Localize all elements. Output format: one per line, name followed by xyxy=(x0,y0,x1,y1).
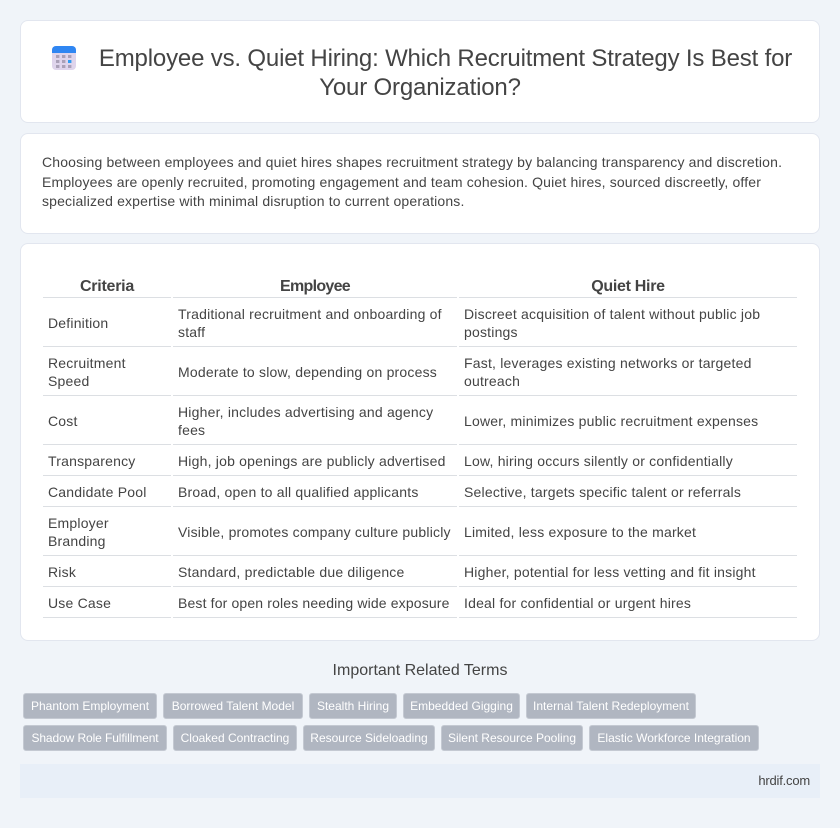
row: Employer Branding: Branding xyxy=(48,533,106,549)
Definition: Quiet Hire: postings xyxy=(464,324,518,340)
Definition: Employee: staff xyxy=(178,324,205,340)
Cost: Employee: fees xyxy=(178,422,205,438)
Cost: Quiet Hire: Lower, minimizes public recruitment expenses xyxy=(464,413,758,429)
text block: introduction: Employees are openly recruited, promoting engagement and team cohesion. Quiet hires, sourced discreetly, offer xyxy=(42,174,761,190)
Cost: Employee: Higher, includes advertising and agency xyxy=(178,404,433,420)
row: Cost: Cost xyxy=(48,413,78,429)
Use Case: Quiet Hire: Ideal for confidential or urgent hires xyxy=(464,595,691,611)
tag: Resource Sideloading xyxy=(303,725,435,751)
tag: Resource Sideloading: Resource Sideloading xyxy=(310,731,428,745)
panel: header xyxy=(20,20,820,123)
tag: Borrowed Talent Model: Borrowed Talent Model xyxy=(172,699,294,713)
icon: calendar xyxy=(52,46,76,70)
tag: Elastic Workforce Integration xyxy=(589,725,759,751)
tag: Shadow Role Fulfillment: Shadow Role Fulfillment xyxy=(31,731,159,745)
table header: Quiet Hire: Quiet Hire xyxy=(591,278,665,295)
tag: Silent Resource Pooling: Silent Resource Pooling xyxy=(448,731,576,745)
tag: Stealth Hiring: Stealth Hiring xyxy=(317,699,389,713)
Candidate Pool: Employee: Broad, open to all qualified applicants xyxy=(178,484,419,500)
row: Transparency: Transparency xyxy=(48,453,135,469)
tag: Internal Talent Redeployment: Internal Talent Redeployment xyxy=(533,699,689,713)
tag: Phantom Employment: Phantom Employment xyxy=(31,699,149,713)
table header: Employee: Employee xyxy=(280,278,350,295)
tag: Silent Resource Pooling xyxy=(441,725,583,751)
row: Definition: Definition xyxy=(48,315,108,331)
Recruitment Speed: Quiet Hire xyxy=(464,355,752,389)
Risk: Quiet Hire: Higher, potential for less vetting and fit insight xyxy=(464,564,756,580)
row: Employer Branding xyxy=(48,515,109,549)
title: Your Organization? xyxy=(319,74,521,101)
row: Risk: Risk xyxy=(48,564,76,580)
Risk: Employee: Standard, predictable due diligence xyxy=(178,564,404,580)
row: Recruitment Speed: Speed xyxy=(48,373,89,389)
tag: Embedded Gigging xyxy=(403,693,520,719)
Recruitment Speed: Quiet Hire: outreach xyxy=(464,373,520,389)
Candidate Pool: Quiet Hire: Selective, targets specific talent or referrals xyxy=(464,484,741,500)
Recruitment Speed: Employee: Moderate to slow, depending on process xyxy=(178,364,437,380)
row: Recruitment Speed xyxy=(48,355,126,389)
Cost: Employee xyxy=(178,404,434,438)
footer bar xyxy=(20,764,820,798)
Transparency: Employee: High, job openings are publicly advertised xyxy=(178,453,446,469)
text block: introduction: Choosing between employees and quiet hires shapes recruitment strategy by balancing transparency and discretion. xyxy=(42,154,782,170)
tag: Phantom Employment xyxy=(23,693,157,719)
Definition: Employee xyxy=(178,306,442,340)
text block: introduction: specialized expertise with minimal disruption to current operations. xyxy=(42,193,465,209)
Definition: Employee: Traditional recruitment and onboarding of xyxy=(178,306,442,322)
tag: Cloaked Contracting: Cloaked Contracting xyxy=(181,731,289,745)
row: Recruitment Speed: Recruitment xyxy=(48,355,126,371)
tag: Borrowed Talent Model xyxy=(163,693,303,719)
tag: Stealth Hiring xyxy=(309,693,397,719)
row: Employer Branding: Employer xyxy=(48,515,109,531)
panel: introduction xyxy=(20,133,820,234)
tag: Elastic Workforce Integration: Elastic Workforce Integration xyxy=(597,731,751,745)
tag: Cloaked Contracting xyxy=(173,725,297,751)
tag: Shadow Role Fulfillment xyxy=(23,725,167,751)
heading: Important Related Terms: Important Related Terms xyxy=(333,662,507,679)
footer: site name: hrdif.com xyxy=(758,773,810,788)
row: Candidate Pool: Candidate Pool xyxy=(48,484,147,500)
Definition: Quiet Hire xyxy=(464,306,760,340)
table header: Criteria: Criteria xyxy=(80,278,134,295)
Transparency: Quiet Hire: Low, hiring occurs silently or confidentially xyxy=(464,453,733,469)
title: Employee vs. Quiet Hiring: Which Recruitment Strategy Is Best for xyxy=(99,45,792,72)
tag: Embedded Gigging: Embedded Gigging xyxy=(410,699,513,713)
text block: introduction xyxy=(42,154,782,209)
Employer Branding: Quiet Hire: Limited, less exposure to the market xyxy=(464,524,696,540)
panel: comparison table xyxy=(20,243,820,641)
Employer Branding: Employee: Visible, promotes company culture publicly xyxy=(178,524,451,540)
Definition: Quiet Hire: Discreet acquisition of talent without public job xyxy=(464,306,760,322)
Use Case: Employee: Best for open roles needing wide exposure xyxy=(178,595,450,611)
title xyxy=(99,45,792,101)
tag: Internal Talent Redeployment xyxy=(526,693,696,719)
row: Use Case: Use Case xyxy=(48,595,111,611)
Recruitment Speed: Quiet Hire: Fast, leverages existing networks or targeted xyxy=(464,355,752,371)
